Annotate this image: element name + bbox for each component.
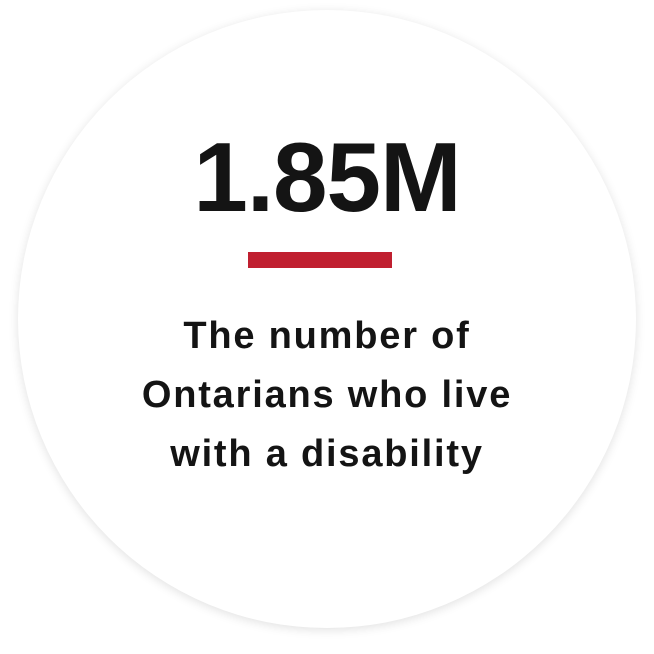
text block: description bbox=[142, 315, 512, 475]
divider bar bbox=[248, 252, 392, 268]
heading: 1.85M: 1.85M bbox=[193, 122, 461, 232]
text block: description: Ontarians who live bbox=[142, 374, 512, 416]
text block: description: The number of bbox=[183, 315, 471, 357]
text block: description: with a disability bbox=[170, 433, 484, 475]
